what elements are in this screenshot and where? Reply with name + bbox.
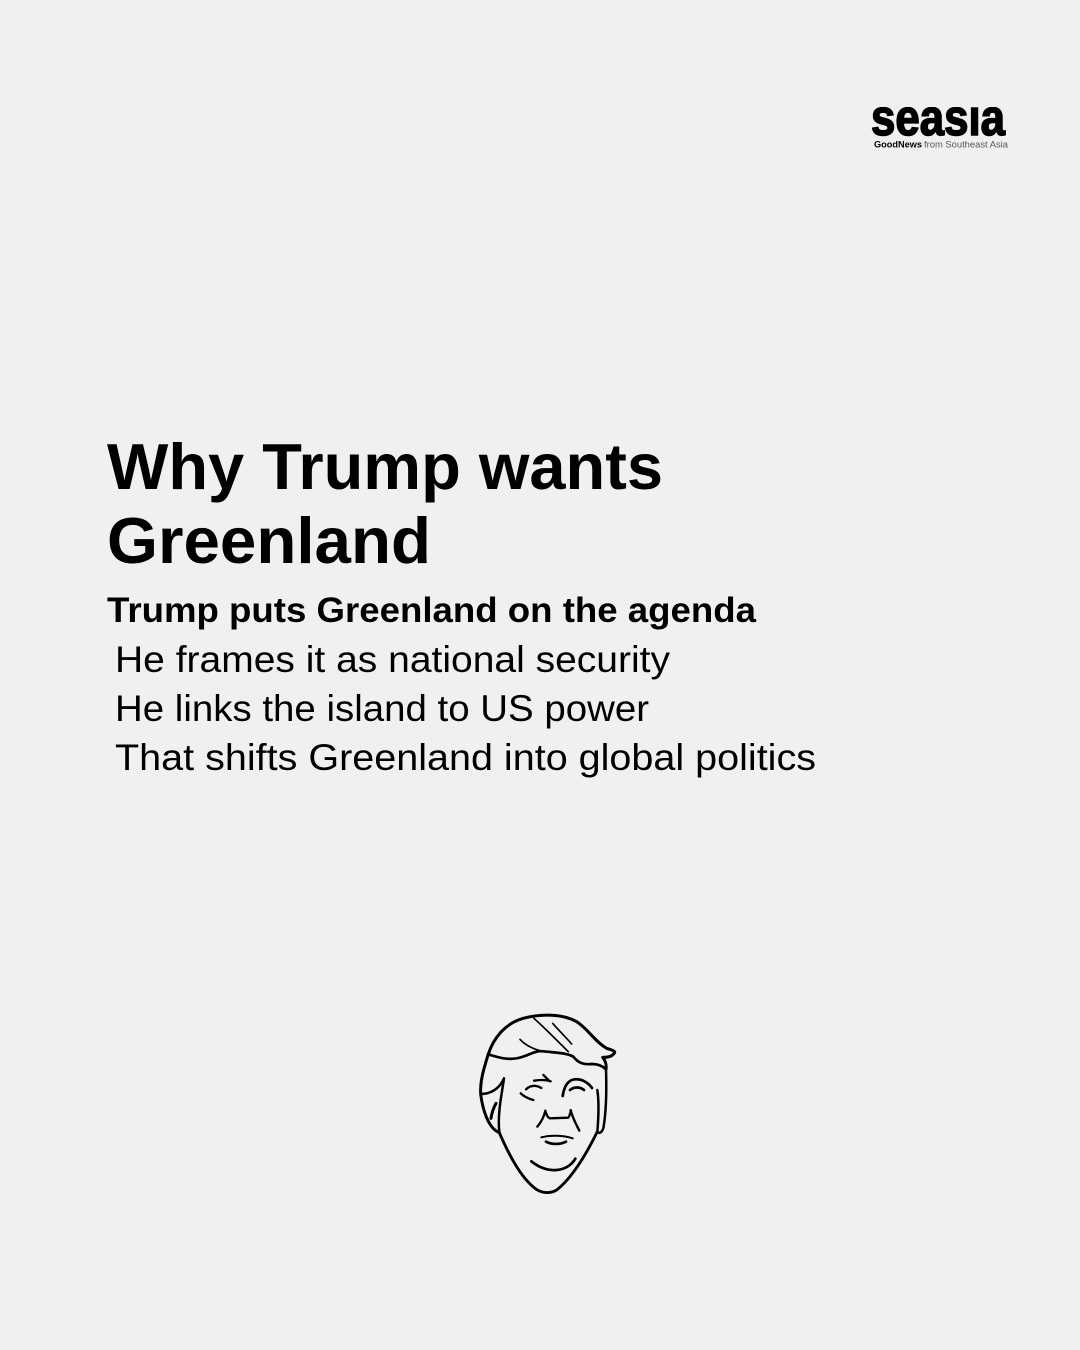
body text lines: That shifts Greenland into global politics xyxy=(115,737,816,778)
icon: Trump face line drawing xyxy=(479,1014,616,1194)
mouth xyxy=(541,1136,573,1138)
hair outline xyxy=(488,1015,615,1069)
hair parting xyxy=(520,1018,572,1052)
logo tagline: GoodNews xyxy=(874,140,922,150)
chin line xyxy=(531,1159,575,1170)
logo wordmark: seasia xyxy=(871,89,1006,146)
title xyxy=(107,430,663,577)
body text lines xyxy=(115,639,816,778)
logo tagline: from Southeast Asia xyxy=(924,140,1009,150)
title: Why Trump wants xyxy=(107,430,663,503)
logo tagline xyxy=(874,140,1009,150)
subheading: Trump puts Greenland on the agenda xyxy=(107,591,757,630)
right eye and brow xyxy=(563,1079,592,1096)
body text lines: He frames it as national security xyxy=(115,639,671,680)
side of head and left ear xyxy=(481,1055,499,1133)
nose xyxy=(537,1110,579,1131)
title: Greenland xyxy=(107,504,431,577)
hair fringe xyxy=(488,1051,606,1069)
left eye and brow xyxy=(521,1075,551,1100)
logo: seasia xyxy=(872,107,1009,150)
jaw xyxy=(499,1132,597,1193)
body text lines: He links the island to US power xyxy=(115,688,649,729)
right side xyxy=(597,1069,606,1133)
